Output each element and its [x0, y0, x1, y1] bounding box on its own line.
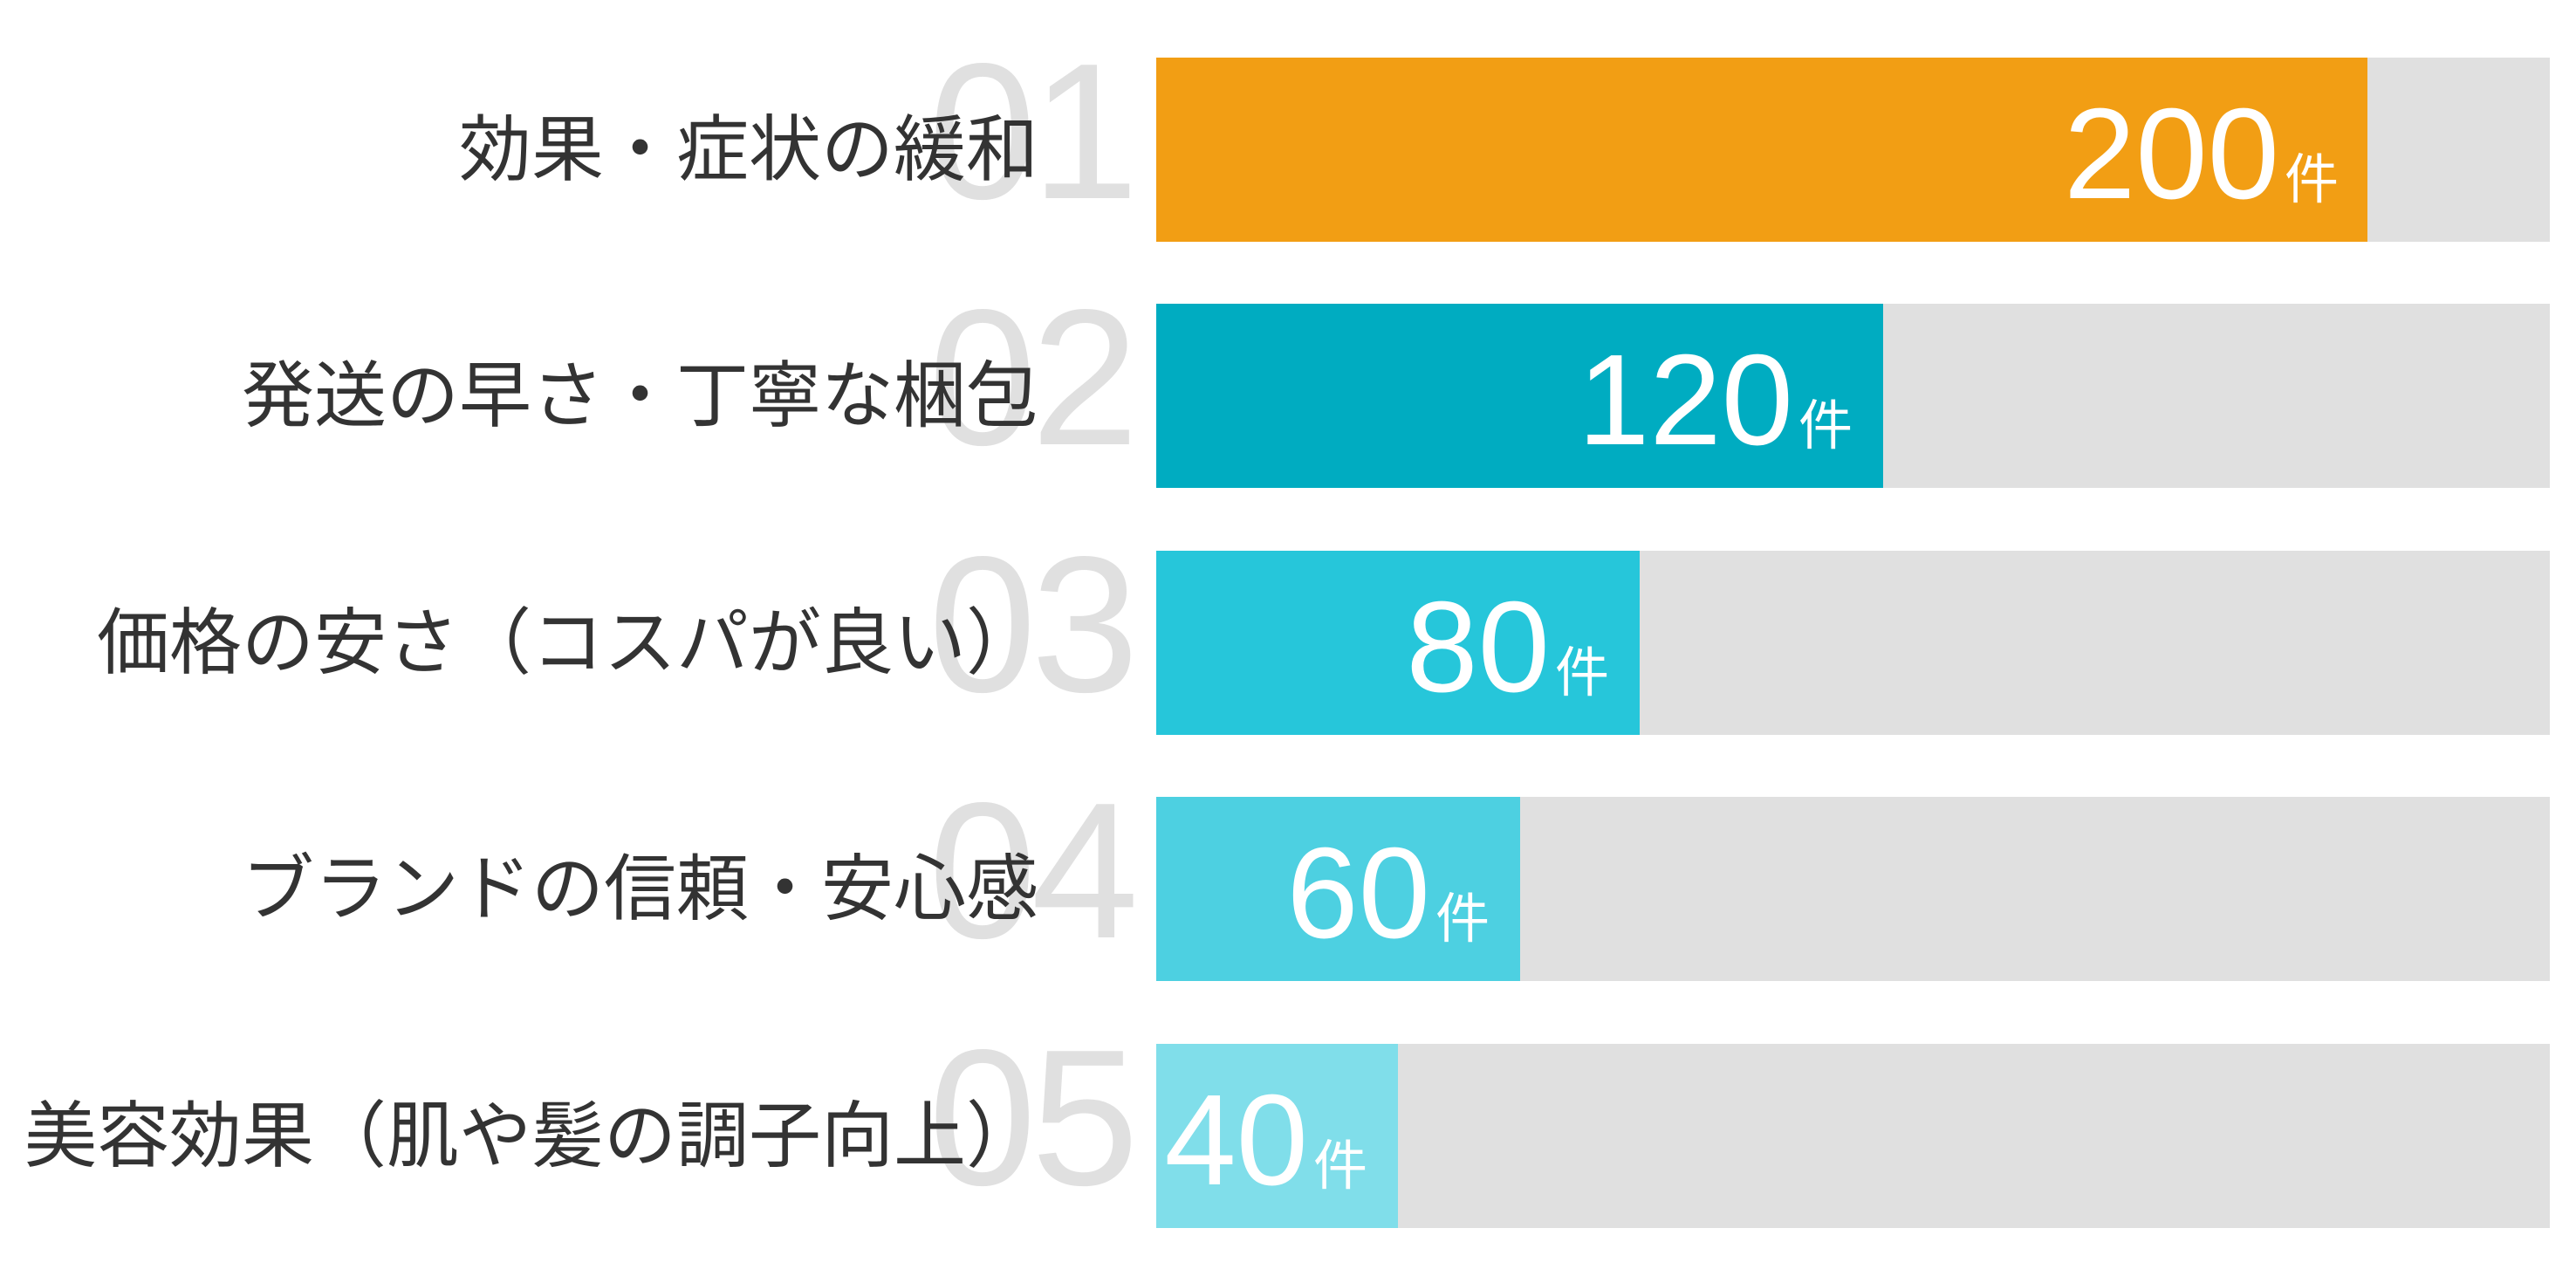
big number 03: 03: [928, 517, 1134, 733]
value 3: 80: [1406, 575, 1550, 719]
big number 02: 02: [928, 270, 1134, 486]
value 4: 60: [1286, 821, 1430, 965]
value 5: 件: [1313, 1122, 1367, 1200]
bar 4: [1156, 797, 1520, 981]
track 3: [1156, 551, 2550, 735]
row 1: 効果・症状の緩和: [459, 24, 2550, 242]
bar 5: [1156, 1044, 1398, 1228]
bar 2: [1156, 304, 1883, 488]
track 4: [1156, 797, 2550, 981]
label 3: 価格の安さ（コスパが良い）: [97, 583, 1038, 688]
label 5: 美容効果（肌や髪の調子向上）: [24, 1077, 1038, 1182]
big number 04: 04: [928, 763, 1134, 979]
value 2: 件: [1798, 381, 1853, 460]
track 5: [1156, 1044, 2550, 1228]
value 5: 40: [1164, 1068, 1308, 1212]
value 1: 200: [2064, 82, 2279, 226]
value 4: 件: [1435, 875, 1490, 953]
bar 1: [1156, 58, 2367, 242]
bar 3: [1156, 551, 1640, 735]
value 1: 件: [2285, 135, 2339, 214]
row 5: 美容効果: [24, 1010, 2550, 1228]
row 4: ブランドの信頼・安心感: [242, 763, 2550, 981]
row 2: 発送の早さ・丁寧な梱包: [242, 270, 2550, 488]
big number 01: 01: [928, 24, 1134, 240]
label 4: ブランドの信頼・安心感: [242, 829, 1038, 934]
big number 05: 05: [928, 1010, 1134, 1226]
value 2: 120: [1578, 328, 1793, 472]
track 1: [1156, 58, 2550, 242]
label 2: 発送の早さ・丁寧な梱包: [242, 337, 1038, 442]
track 2: [1156, 304, 2550, 488]
value 3: 件: [1555, 628, 1609, 707]
label 1: 効果・症状の緩和: [459, 91, 1038, 196]
row 3: 価格の安さ: [97, 517, 2550, 735]
